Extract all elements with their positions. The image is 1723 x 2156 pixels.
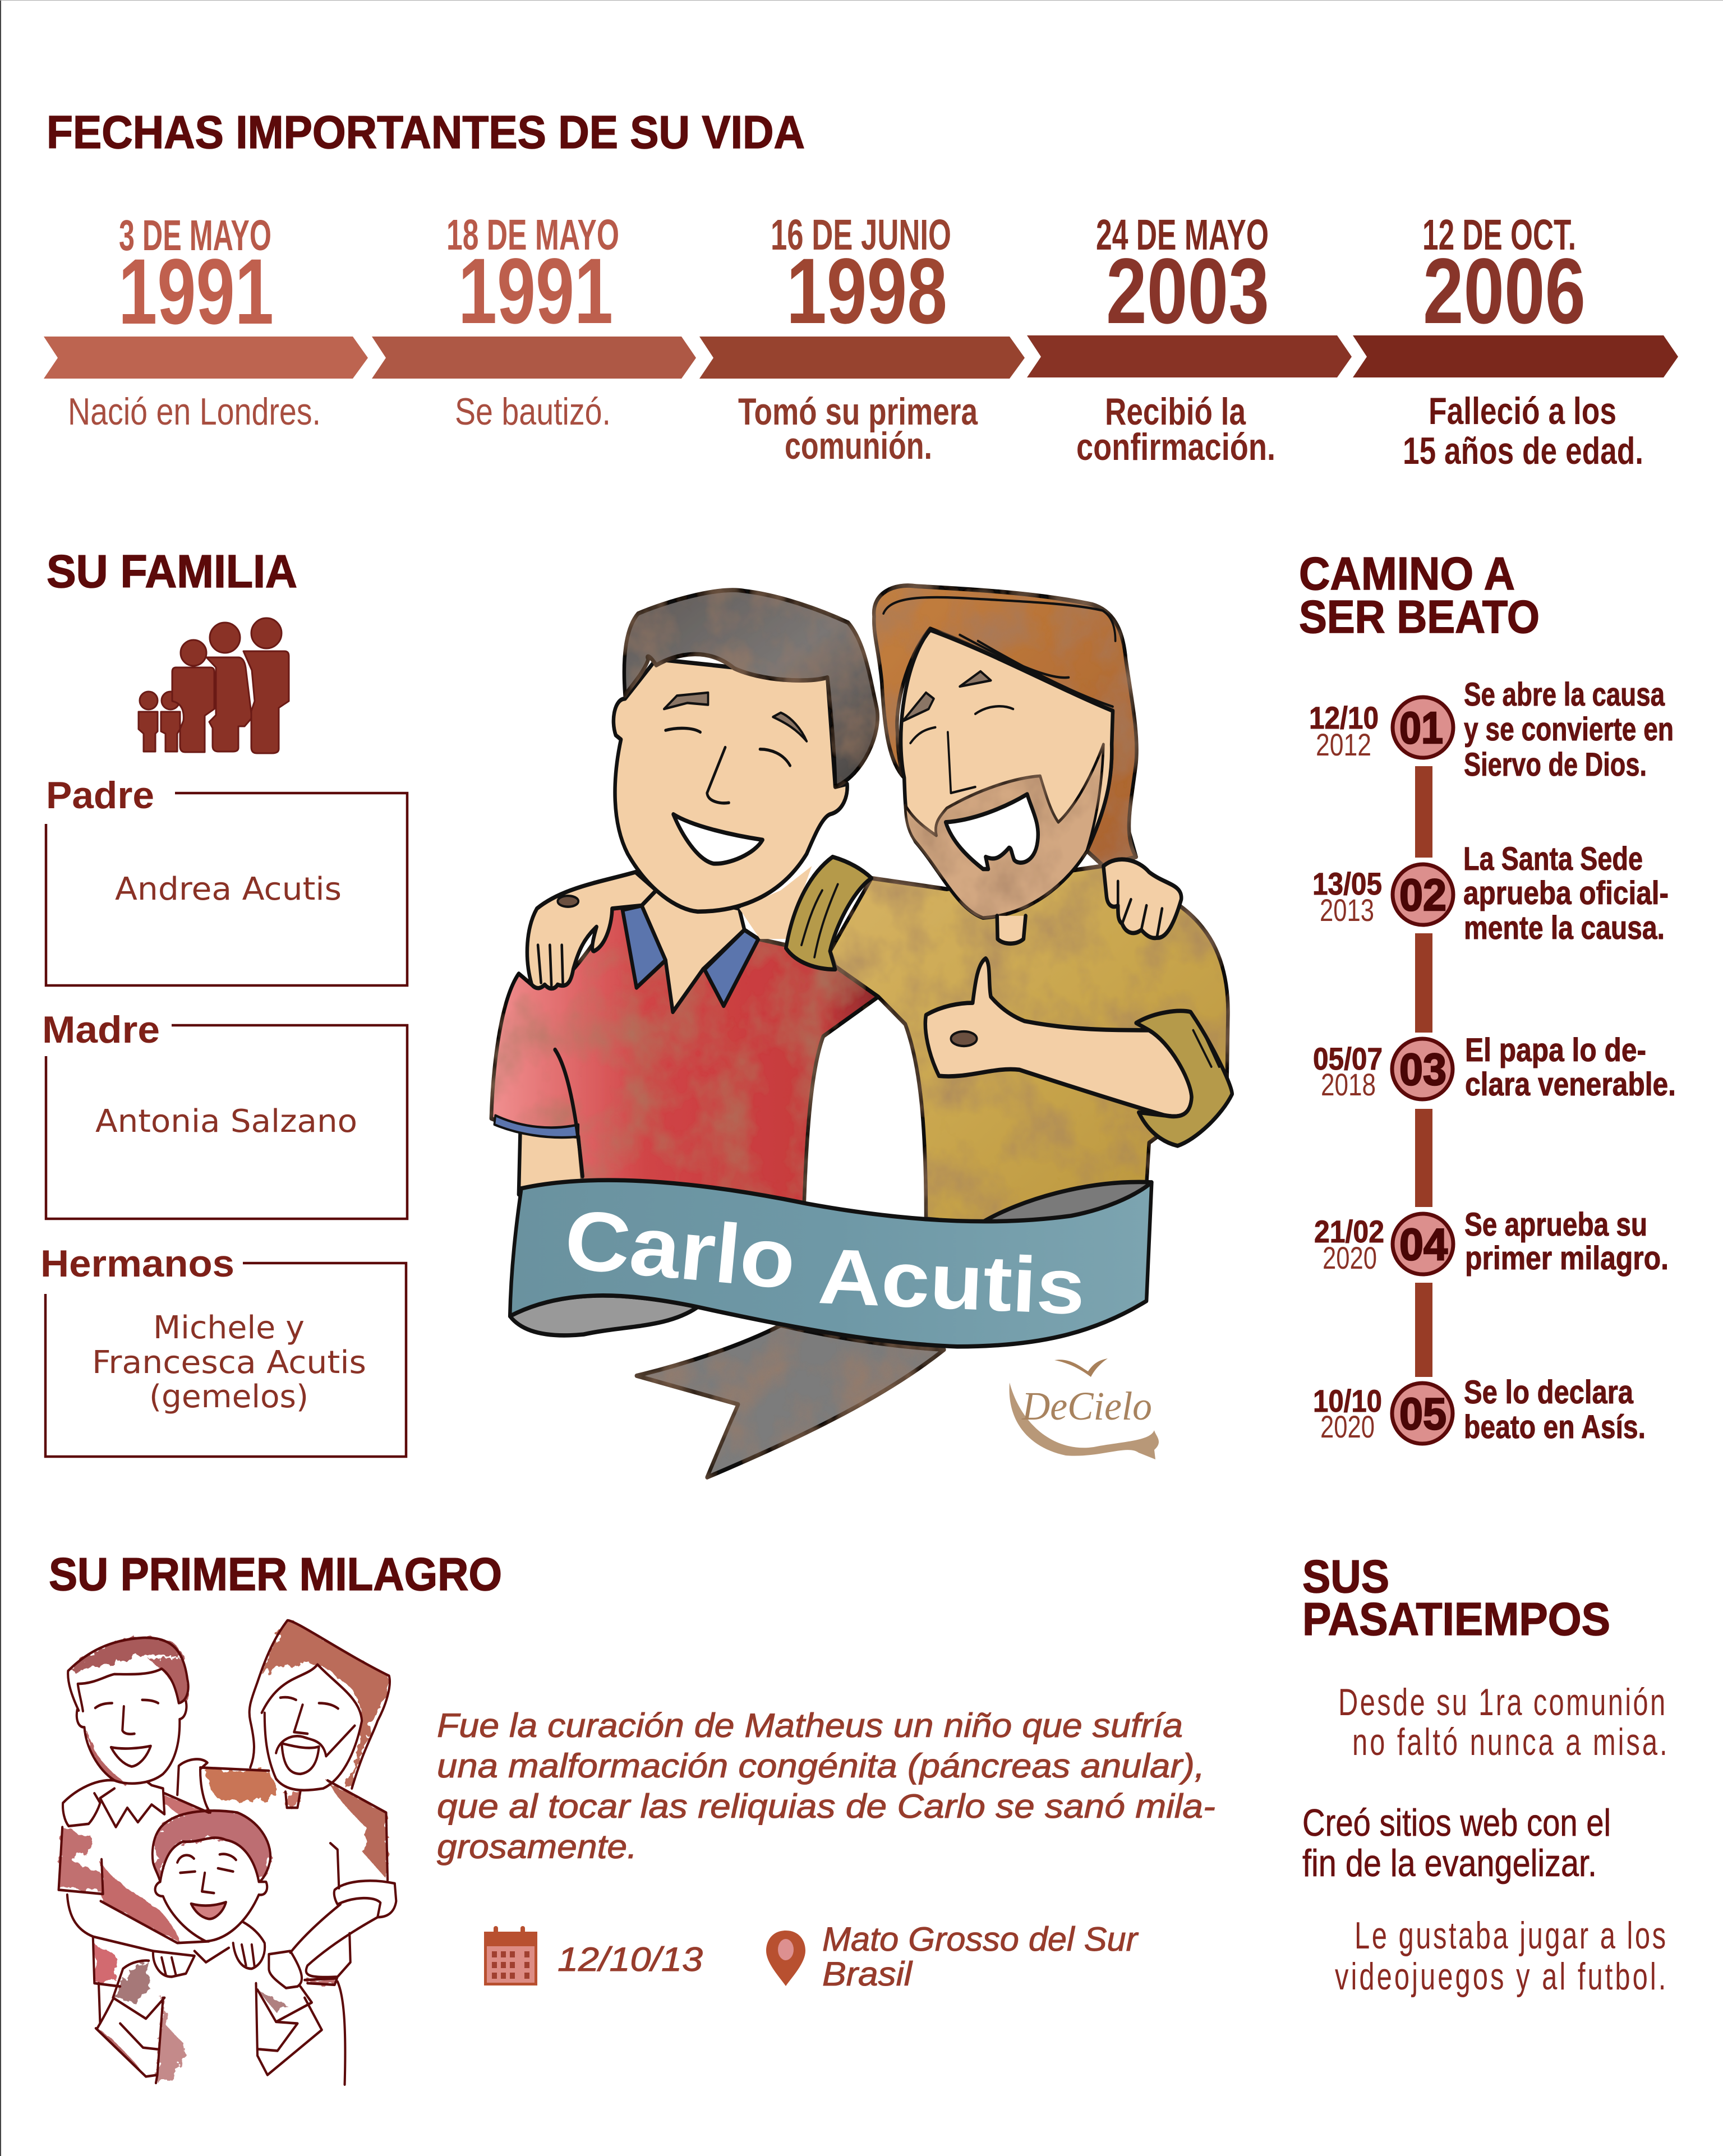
Carlo face: [614, 659, 847, 911]
hobby 1: Desde su 1ra comunión: [1338, 1680, 1665, 1724]
right man: [250, 1620, 390, 1789]
milestone 5: 15 años de edad.: [1403, 430, 1643, 472]
panel: padre: [46, 774, 407, 985]
heading: sus pasatiempos: [1302, 1550, 1610, 1645]
hobby 1: no faltó nunca a misa.: [1352, 1720, 1667, 1763]
hobby 1: [1338, 1680, 1667, 1763]
milestone 2: 18 DE MAYO: [446, 211, 619, 259]
milestone 1: [44, 211, 368, 433]
milestone 1: 3 DE MAYO: [119, 211, 271, 260]
step 01: 12/10: [1309, 700, 1379, 735]
step 03: El papa lo de-: [1465, 1032, 1646, 1068]
Carlo features: [664, 693, 807, 741]
logo: DeCielo: DeCielo: [1021, 1384, 1152, 1429]
step 04: Se aprueba su: [1464, 1206, 1647, 1243]
text: milagro description: una malformación congénita (páncreas anular),: [437, 1747, 1205, 1785]
panel: hermanos: Hermanos: [40, 1242, 234, 1285]
milestone 5: [1353, 211, 1678, 472]
step 01: 2012: [1316, 727, 1371, 762]
panel: hermanos: Michele y: [153, 1310, 305, 1346]
milestone 5: 2006: [1423, 239, 1586, 343]
step 05: 10/10: [1313, 1383, 1382, 1418]
Carlo neck: [642, 890, 744, 1012]
milestone 4: 24 DE MAYO: [1096, 211, 1269, 259]
step 02: 2013: [1320, 892, 1374, 928]
Jesus right sleeve: [1136, 1011, 1232, 1146]
milestone 2: 1991: [458, 239, 613, 343]
step 02: aprueba oficial-: [1463, 875, 1669, 911]
step 02: [1312, 841, 1669, 946]
milestone 1: 1991: [118, 240, 274, 344]
milestone 4: confirmación.: [1076, 426, 1275, 468]
panel: madre: Antonia Salzano: [95, 1103, 357, 1140]
step 05: 2020: [1320, 1409, 1375, 1444]
milestone 1: Nació en Londres.: [68, 390, 321, 433]
step 01: Siervo de Dios.: [1464, 747, 1647, 783]
logo: DeCielo: [1010, 1358, 1159, 1459]
icon: family: [139, 618, 289, 753]
step 01: [1309, 676, 1674, 783]
step 03: 2018: [1321, 1067, 1376, 1102]
step 04: [1314, 1206, 1669, 1277]
text: pasatiempos: [1302, 1680, 1667, 1998]
ribbon name: Carlo: [561, 1192, 800, 1307]
panel: hermanos: (gemelos): [149, 1379, 308, 1415]
milestone 3: Tomó su primera: [738, 390, 978, 433]
text: milagro description: que al tocar las reliquias de Carlo se sanó mila-: [437, 1788, 1215, 1825]
miracle place: Mato Grosso del Sur: [822, 1920, 1139, 1958]
text: milagro description: grosamente.: [437, 1828, 637, 1865]
timeline: camino a ser beato: [1309, 676, 1676, 1445]
sleeve cuff: [494, 1116, 578, 1137]
thumb up forearm: [925, 959, 1192, 1117]
ribbon tail: [637, 1325, 944, 1477]
step 03: clara venerable.: [1465, 1066, 1676, 1103]
panel: madre: [42, 1008, 407, 1219]
Carlo hand on shoulder: [1103, 859, 1181, 938]
milestone 5: Falleció a los: [1429, 390, 1616, 432]
step 05: 05: [1399, 1389, 1446, 1439]
hobby 2: Creó sitios web con el: [1302, 1802, 1611, 1844]
step 02: La Santa Sede: [1463, 841, 1643, 877]
timeline: fechas: [44, 211, 1678, 472]
hobby 3: Le gustaba jugar a los: [1355, 1914, 1666, 1957]
child: [153, 1811, 270, 1882]
miracle place: Brasil: [822, 1955, 913, 1993]
heading: sus pasatiempos: PASATIEMPOS: [1302, 1593, 1610, 1645]
panel: padre: Andrea Acutis: [115, 871, 342, 907]
text: milagro description: [437, 1707, 1215, 1865]
step 05: [1313, 1374, 1646, 1445]
Jesus sleeve over Carlo: [786, 857, 872, 969]
heading: su primer milagro: SU PRIMER MILAGRO: [49, 1548, 502, 1600]
step 04: 21/02: [1314, 1214, 1384, 1249]
Carlo red shirt: [491, 905, 878, 1206]
hobby 3: videojuegos y al futbol.: [1335, 1955, 1666, 1998]
panel: padre: Padre: [46, 774, 154, 817]
colour patches: [59, 1620, 389, 2081]
milestone 4: 2003: [1106, 239, 1269, 343]
heading: camino a ser beato: [1299, 547, 1540, 643]
Carlo hair: [624, 590, 878, 787]
title: fechas importantes: FECHAS IMPORTANTES DE SU VIDA: [47, 106, 805, 158]
Jesus hair and face: [874, 586, 1137, 866]
step 02: 13/05: [1312, 866, 1382, 901]
ribbon name: [561, 1192, 1087, 1331]
step 04: 2020: [1323, 1240, 1377, 1275]
Jesus arm behind neck and hand on shoulder: [739, 866, 812, 939]
step 05: beato en Asís.: [1464, 1409, 1646, 1445]
ribbon: [510, 1180, 1151, 1347]
heading: sus pasatiempos: SUS: [1302, 1550, 1389, 1602]
miracle place: [822, 1920, 1139, 1993]
step 03: 05/07: [1313, 1041, 1383, 1076]
panel: hermanos: Francesca Acutis: [92, 1344, 366, 1381]
step 01: y se convierte en: [1464, 711, 1674, 748]
icon: location pin: [766, 1931, 805, 1986]
milestone 2: Se bautizó.: [455, 390, 611, 433]
milestone 3: 1998: [786, 239, 947, 343]
heading: camino a ser beato: CAMINO A: [1299, 547, 1515, 600]
Jesus shirt: [830, 866, 1228, 1224]
heading: camino a ser beato: SER BEATO: [1299, 591, 1540, 643]
milestone 3: 16 DE JUNIO: [771, 211, 951, 259]
hobby 2: [1302, 1802, 1611, 1885]
illustration: Carlo and Jesus: [491, 586, 1232, 1477]
step 03: 03: [1399, 1044, 1446, 1094]
panel: hermanos: [40, 1242, 406, 1457]
milestone 2: [372, 211, 696, 433]
Carlo arm below sleeve: [519, 1127, 584, 1195]
hobby 2: fin de la evangelizar.: [1302, 1842, 1597, 1885]
step 04: 04: [1399, 1219, 1448, 1269]
step 04: primer milagro.: [1465, 1240, 1669, 1277]
step 03: [1313, 1032, 1676, 1103]
text: milagro description: Fue la curación de Matheus un niño que sufría: [437, 1707, 1183, 1744]
left man: [68, 1638, 188, 1711]
hobby 3: [1335, 1914, 1666, 1998]
miracle date: 12/10/13: [558, 1941, 703, 1978]
heading: su familia: SU FAMILIA: [47, 545, 297, 597]
illustration: first miracle family: [59, 1620, 396, 2085]
collar: [623, 905, 666, 988]
milestone 4: [1027, 211, 1352, 468]
milestone 5: 12 DE OCT.: [1422, 211, 1576, 259]
Jesus back hair strand: [1087, 811, 1136, 866]
ribbon name: Acutis: [817, 1232, 1087, 1331]
step 02: 02: [1399, 870, 1446, 920]
step 01: 01: [1399, 703, 1443, 753]
step 02: mente la causa.: [1464, 910, 1665, 946]
panel: madre: Madre: [42, 1008, 160, 1051]
milestone 3: [699, 211, 1025, 467]
icon: calendar: [484, 1926, 537, 1985]
step 05: Se lo declara: [1464, 1374, 1634, 1411]
milestone 4: Recibió la: [1105, 390, 1246, 433]
step 01: Se abre la causa: [1464, 676, 1665, 713]
milestone 3: comunión.: [785, 425, 932, 467]
